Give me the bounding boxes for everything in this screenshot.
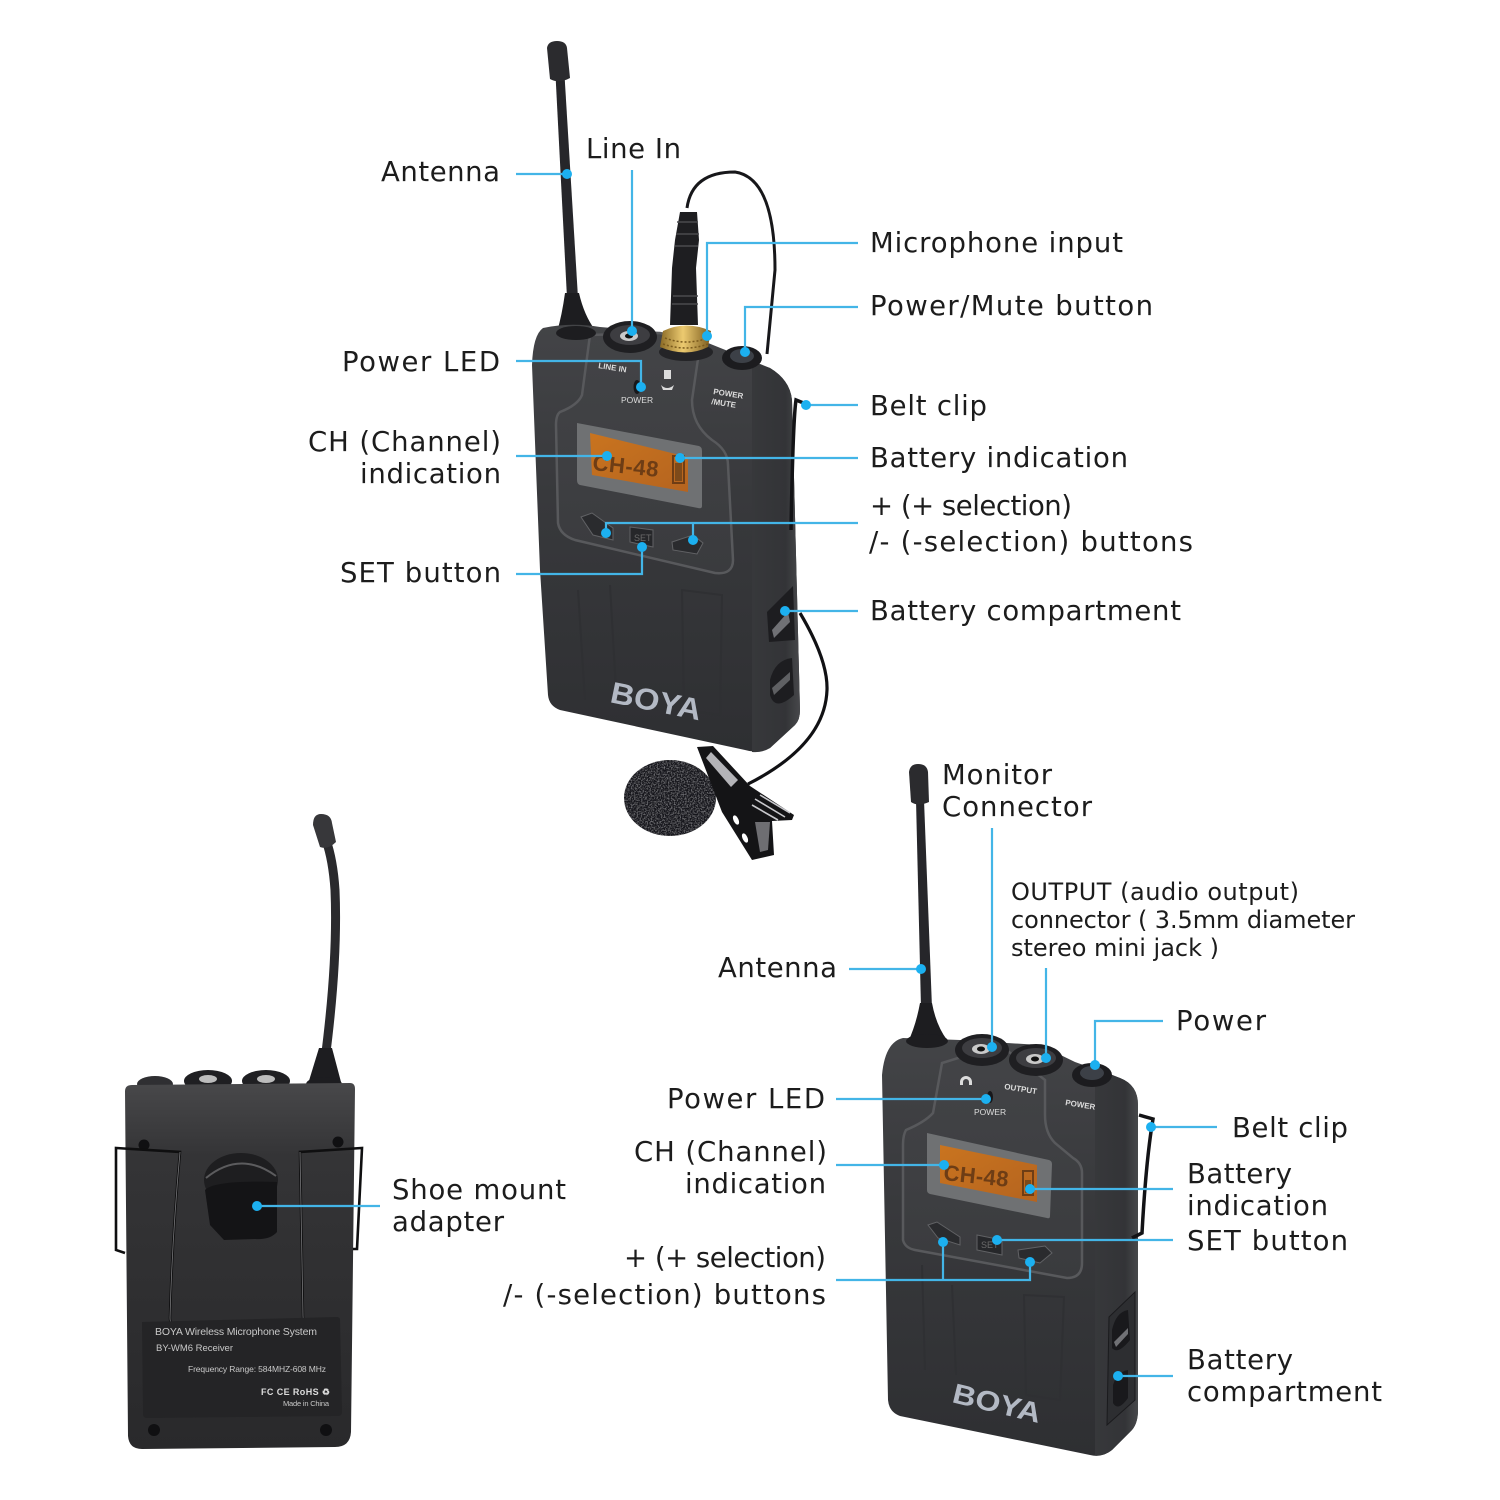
labels: transmitter: Line In — [586, 133, 681, 165]
panel: specification label — [142, 1317, 342, 1418]
text: device markings — [598, 361, 744, 410]
icon: control buttons — [928, 1222, 1052, 1263]
logo: BOYA: BOYA — [950, 1378, 1044, 1429]
icon: microphone cable loop — [687, 172, 775, 354]
icon: power mute button — [722, 346, 762, 370]
labels: receiver front: indication — [685, 1168, 826, 1200]
panel: LCD display — [927, 1133, 1052, 1218]
belt clip wire — [1132, 1115, 1153, 1238]
panel: specification label: Made in China — [283, 1399, 330, 1408]
text: device markings: POWER — [621, 395, 653, 405]
labels: receiver front: + (+ selection) — [624, 1242, 826, 1274]
panel: specification label: Frequency Range: 584MHZ-608 MHz — [188, 1364, 326, 1374]
icon: receiver antenna — [908, 764, 947, 1042]
labels: transmitter: Power/Mute button — [870, 290, 1153, 322]
icon: rear antenna — [308, 814, 341, 1084]
labels: receiver front — [503, 759, 1382, 1408]
icon: output jack — [1009, 1044, 1063, 1076]
labels: receiver front: SET button — [1187, 1225, 1348, 1257]
labels: shoe mount — [392, 1174, 566, 1238]
text: device markings — [960, 1076, 1096, 1117]
text: device markings: OUTPUT — [1004, 1082, 1038, 1096]
belt clip wire — [791, 400, 806, 530]
text: device markings: POWER — [713, 387, 744, 401]
icon: battery compartment latches — [767, 586, 795, 704]
panel: specification label: BOYA Wireless Microphone System — [155, 1326, 317, 1338]
labels: receiver front: Battery — [1187, 1344, 1293, 1376]
labels: shoe mount: Shoe mount — [392, 1174, 566, 1206]
icon: lavalier cable — [748, 613, 827, 784]
callout lines and dots: transmitter — [516, 169, 858, 616]
labels: receiver front: Monitor — [942, 759, 1053, 791]
labels: shoe mount: adapter — [392, 1206, 505, 1238]
icon: monitor connector jack — [955, 1034, 1009, 1066]
icon: control buttons — [581, 513, 703, 554]
labels: transmitter: Battery indication — [870, 442, 1128, 474]
labels: transmitter: CH (Channel) — [308, 426, 501, 458]
icon: antenna base collar — [556, 326, 596, 340]
labels: transmitter: Antenna — [381, 156, 500, 188]
labels: transmitter: Power LED — [342, 346, 500, 378]
labels: transmitter: Microphone input — [870, 227, 1123, 259]
icon: belt clip wire — [116, 1148, 362, 1326]
icon: control buttons: SET — [981, 1240, 999, 1250]
callout line and dot: shoe mount — [252, 1201, 380, 1211]
icon: control buttons: SET — [634, 533, 652, 543]
labels: receiver front: Antenna — [718, 952, 837, 984]
callout lines and dots: receiver front — [836, 828, 1217, 1381]
icon: shoe mount adapter — [204, 1153, 278, 1240]
labels: receiver front: Power — [1176, 1005, 1267, 1037]
icon: power button — [1072, 1063, 1112, 1087]
labels: transmitter: Belt clip — [870, 390, 987, 422]
panel: LCD display: CH-48 — [591, 450, 660, 482]
labels: transmitter — [308, 133, 1193, 627]
icon: top controls — [137, 1070, 342, 1092]
device: receiver front view — [882, 764, 1153, 1456]
icon: antenna base collar — [906, 1034, 948, 1048]
panel: specification label: FC CE RoHS ♻ — [261, 1387, 330, 1397]
labels: receiver front: Belt clip — [1232, 1112, 1348, 1144]
labels: receiver front: CH (Channel) — [634, 1136, 827, 1168]
panel: rear body — [125, 1083, 355, 1449]
device: receiver rear view — [116, 814, 362, 1449]
labels: transmitter: Battery compartment — [870, 595, 1181, 627]
panel: specification label: BY-WM6 Receiver — [156, 1343, 233, 1354]
labels: receiver front: compartment — [1187, 1376, 1382, 1408]
icon: screw holes — [138, 1136, 344, 1436]
device: transmitter with lavalier microphone — [532, 41, 827, 860]
labels: receiver front: /- (-selection) buttons — [503, 1279, 826, 1311]
labels: transmitter: SET button — [340, 557, 501, 589]
icon: microphone plug — [659, 212, 713, 361]
text: device markings: /MUTE — [711, 397, 737, 410]
labels: receiver front: stereo mini jack ) — [1011, 934, 1219, 962]
panel: LCD display — [577, 423, 702, 508]
icon: line-in jack — [603, 321, 657, 353]
labels: receiver front: connector ( 3.5mm diameter — [1011, 906, 1355, 934]
icon: transmitter antenna — [547, 41, 595, 332]
text: device markings: POWER — [974, 1107, 1006, 1117]
labels: receiver front: Power LED — [667, 1083, 825, 1115]
text: device markings: POWER — [1065, 1098, 1096, 1112]
labels: receiver front: Connector — [942, 791, 1093, 823]
labels: receiver front: indication — [1187, 1190, 1328, 1222]
panel: transmitter body — [532, 325, 800, 752]
icon: battery compartment latches — [1107, 1292, 1135, 1425]
labels: receiver front: Battery — [1187, 1158, 1292, 1190]
panel: receiver body — [882, 1038, 1138, 1456]
logo: BOYA: BOYA — [608, 677, 704, 727]
text: device markings: LINE IN — [598, 361, 627, 374]
labels: receiver front: OUTPUT (audio output) — [1011, 878, 1299, 906]
panel: LCD display: CH-48 — [942, 1160, 1010, 1192]
labels: transmitter: indication — [360, 458, 501, 490]
labels: transmitter: + (+ selection) — [870, 490, 1072, 522]
labels: transmitter: /- (-selection) buttons — [869, 526, 1193, 558]
icon: lavalier microphone foam and clip — [624, 746, 794, 860]
